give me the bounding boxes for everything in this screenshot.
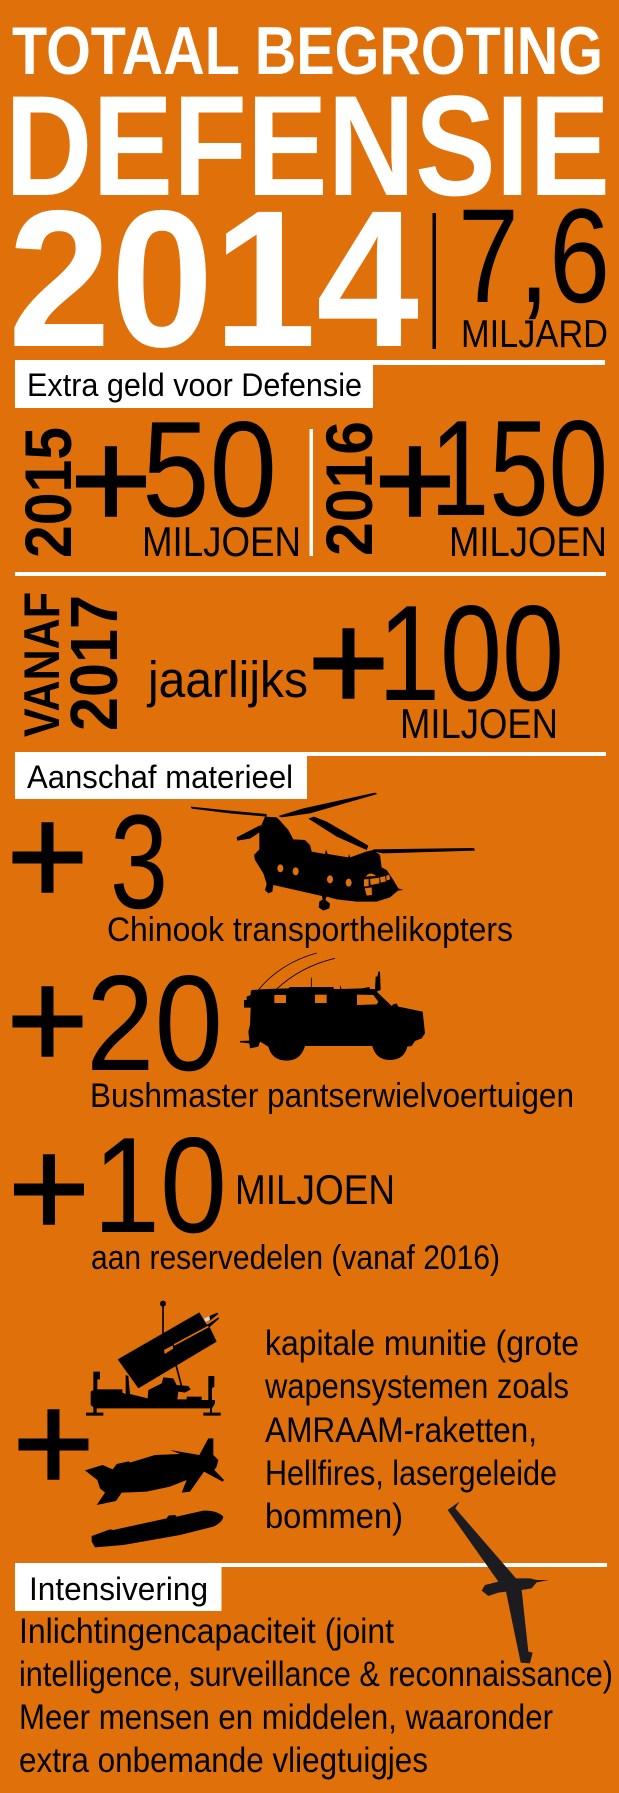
icon: guided bomb [85, 1438, 224, 1505]
plus sign: + [70, 401, 152, 558]
section heading: aanschaf materieel: Aanschaf materieel [27, 759, 293, 795]
text: kapitale munitie description: kapitale munitie (grote [265, 1324, 579, 1363]
label: vanaf: VANAF [14, 592, 70, 737]
year: 2016: 2016 [312, 421, 386, 556]
text: inlichtingencapaciteit description: Meer mensen en middelen, waaronder [19, 1698, 553, 1737]
unit: miljoen: MILJOEN [235, 1166, 395, 1213]
plus sign: + [7, 941, 88, 1098]
text: kapitale munitie description [264, 1324, 579, 1536]
text: kapitale munitie description: wapensystemen zoals [264, 1367, 569, 1406]
unit: miljoen: MILJOEN [400, 700, 558, 747]
number: 20: 20 [86, 947, 223, 1099]
section heading: extra geld voor defensie [15, 360, 605, 408]
plus sign: + [308, 583, 389, 740]
item: plus 10 miljoen reservedelen [8, 1109, 500, 1277]
text: kapitale munitie description: Hellfires, lasergeleide [265, 1454, 557, 1493]
plus sign: + [8, 1109, 90, 1266]
text: inlichtingencapaciteit description: Inlichtingencapaciteit (joint [19, 1612, 394, 1651]
section heading: intensivering: Intensivering [29, 1571, 208, 1607]
number: 10: 10 [93, 1109, 227, 1261]
section heading: aanschaf materieel [15, 752, 606, 799]
item: plus kapitale munitie [13, 1301, 579, 1547]
year: 2017: 2017 [57, 595, 132, 731]
caption: aan reservedelen: aan reservedelen (vanaf 2016) [91, 1239, 500, 1277]
number: 50: 50 [142, 393, 277, 545]
text: inlichtingencapaciteit description: extra onbemande vliegtuigjes [19, 1741, 428, 1780]
number: 3: 3 [110, 788, 168, 937]
total budget figure [432, 182, 610, 356]
item: plus 3 chinook [7, 777, 513, 949]
panel: 2015 plus 50 miljoen [11, 393, 301, 565]
icon: bushmaster vehicle [240, 953, 425, 1061]
text: jaarlijks: jaarlijks [146, 651, 308, 708]
icon: unmanned aerial vehicle [448, 1502, 549, 1663]
text: inlichtingencapaciteit description [19, 1612, 613, 1780]
panel: vanaf 2017 jaarlijks plus 100 miljoen [14, 577, 564, 747]
icon: chinook helicopter [191, 793, 475, 911]
text: kapitale munitie description: bommen) [265, 1497, 403, 1536]
title block [5, 13, 610, 388]
year: 2015: 2015 [11, 427, 85, 558]
icon: cruise missile [92, 1511, 223, 1547]
item: plus 20 bushmaster [7, 941, 574, 1115]
plus sign: + [7, 777, 88, 934]
icon: missile launcher [86, 1301, 221, 1416]
section heading: extra geld voor defensie: Extra geld voor Defensie [27, 367, 362, 403]
caption: chinook transporthelikopters: Chinook transporthelikopters [107, 911, 513, 949]
title year: 2014: 2014 [8, 170, 419, 388]
caption: bushmaster pantserwielvoertuigen: Bushmaster pantserwielvoertuigen [90, 1077, 574, 1115]
plus sign: + [13, 1364, 94, 1521]
plus sign: + [374, 401, 456, 558]
panel: 2016 plus 150 miljoen [312, 392, 608, 565]
section heading: intensivering [15, 1563, 607, 1611]
text: kapitale munitie description: AMRAAM-raketten, [265, 1411, 537, 1450]
number: 100: 100 [378, 577, 564, 729]
unit: miljoen: MILJOEN [142, 518, 301, 565]
